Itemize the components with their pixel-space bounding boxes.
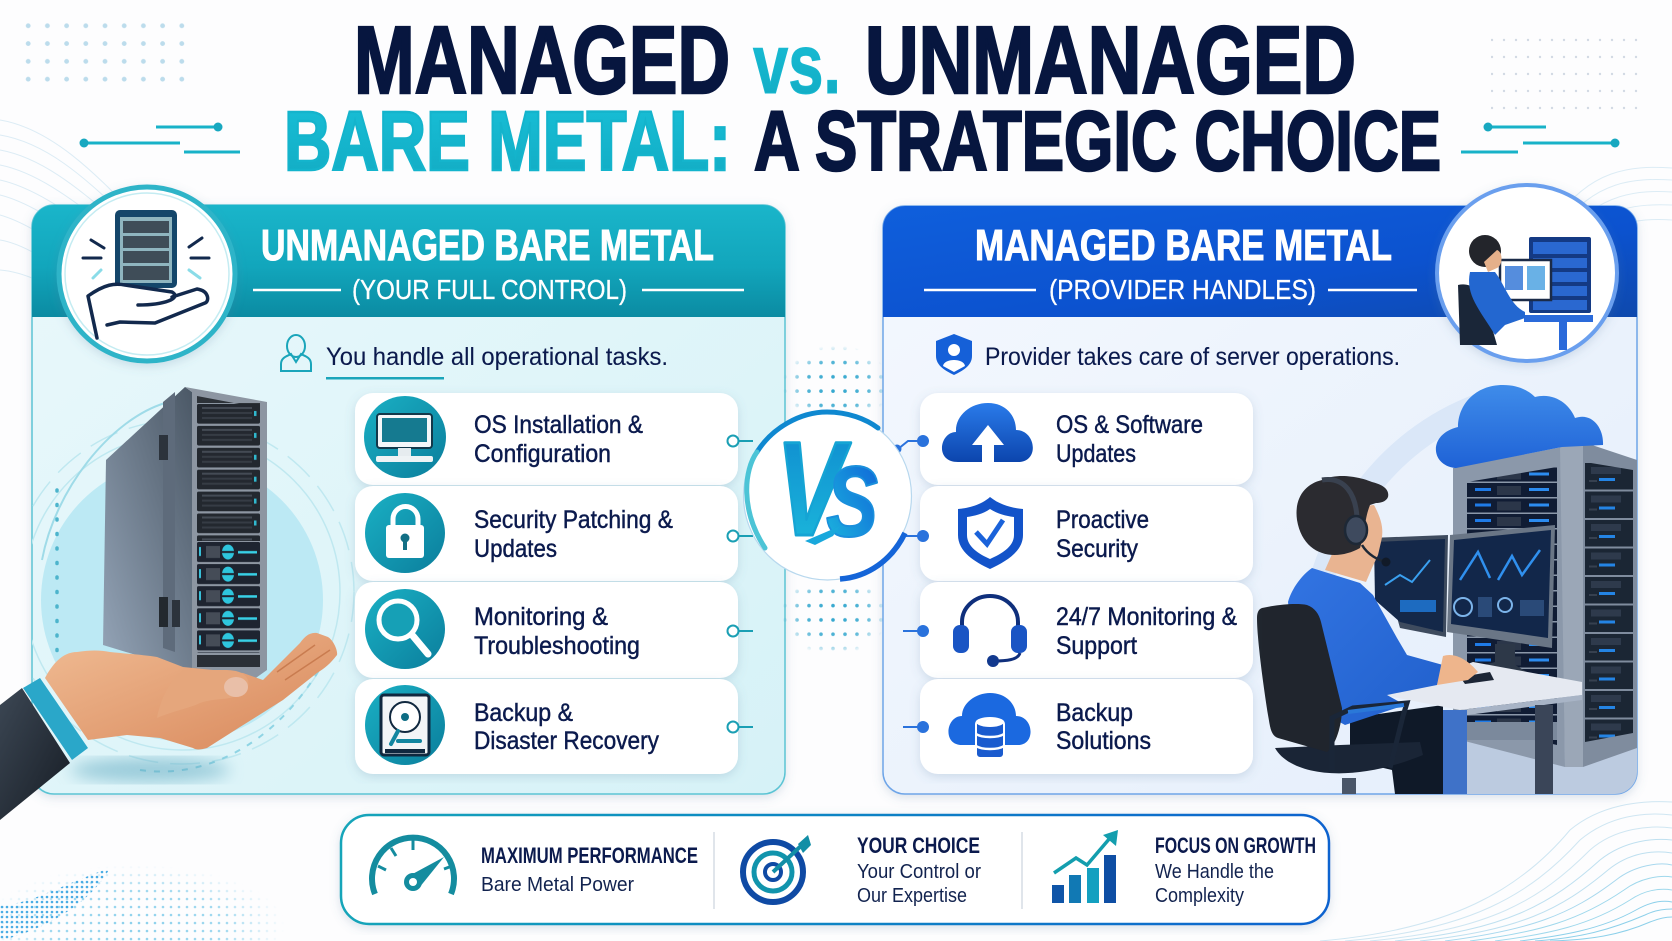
chair pedestal — [1342, 778, 1356, 794]
benefit: choice: Our Expertise — [857, 885, 967, 907]
card: monitoring: Monitoring & — [474, 603, 608, 631]
header title: MANAGED BARE METAL — [975, 221, 1392, 270]
benefit: choice — [857, 833, 981, 907]
decorative orbit — [10, 403, 354, 772]
header title: UNMANAGED BARE METAL — [261, 221, 714, 270]
hand — [45, 633, 337, 750]
card: proactive security: Security — [1056, 535, 1138, 563]
header subtitle: (PROVIDER HANDLES) — [1049, 274, 1316, 305]
icon: growth chart — [1052, 830, 1118, 903]
keyboard — [1460, 672, 1494, 684]
dotted wave: bottom left — [0, 865, 285, 941]
icon: managed badge — [1437, 185, 1617, 361]
cuff — [23, 678, 88, 760]
title: MANAGED — [354, 7, 730, 114]
shirt — [1288, 568, 1443, 725]
card: proactive security: Proactive — [1056, 506, 1149, 534]
sleeve — [0, 688, 70, 820]
card: monitoring — [355, 582, 738, 678]
title accent lines: right — [1461, 122, 1620, 152]
header subtitle: (YOUR FULL CONTROL) — [352, 274, 627, 305]
arc: left cyan — [747, 452, 765, 548]
card: OS updates: Updates — [1056, 440, 1136, 468]
fingers — [277, 645, 330, 680]
benefit: growth: Complexity — [1155, 885, 1244, 907]
panel: unmanaged bare metal — [32, 205, 785, 794]
tagline: Provider takes care of server operations. — [985, 343, 1400, 371]
benefit: growth — [1155, 833, 1316, 907]
card: OS installation: Configuration — [474, 440, 611, 468]
desk — [1383, 662, 1582, 794]
dot grid: top right — [1491, 29, 1639, 114]
halftone bottom — [783, 578, 882, 650]
engineer legs — [1350, 705, 1443, 794]
title — [284, 7, 1441, 188]
badge monitor — [1500, 260, 1551, 300]
panel: managed bare metal — [883, 206, 1637, 794]
monitor right — [1447, 525, 1555, 648]
VS badge — [744, 345, 912, 656]
benefit: choice: Your Control or — [857, 861, 981, 883]
halftone top — [784, 346, 883, 408]
panel header — [883, 206, 1637, 317]
card: 24/7 monitoring: 24/7 Monitoring & — [1056, 603, 1237, 631]
icon: gauge — [372, 838, 454, 894]
card: OS updates — [920, 393, 1253, 485]
engineer hand — [1437, 655, 1478, 685]
ring — [744, 412, 912, 580]
list: managed services — [894, 393, 1253, 774]
VS letters: V — [776, 415, 851, 564]
floor — [1467, 742, 1637, 794]
card: security patching: Updates — [474, 535, 557, 563]
benefit: growth: FOCUS ON GROWTH — [1155, 833, 1316, 858]
panel header — [32, 205, 785, 317]
badge hand — [88, 284, 208, 338]
card: backup — [355, 679, 738, 774]
connectors: left — [728, 436, 753, 732]
title: A STRATEGIC CHOICE — [754, 94, 1441, 188]
benefit: performance — [481, 843, 698, 896]
chair back — [1257, 604, 1342, 752]
cloud — [1436, 385, 1603, 468]
card: monitoring: Troubleshooting — [474, 632, 640, 660]
dotted column — [55, 490, 59, 660]
chair seat — [1275, 742, 1423, 773]
tagline: You handle all operational tasks. — [326, 343, 668, 371]
neck and face — [1325, 505, 1382, 582]
monitor left — [1370, 535, 1448, 637]
list: unmanaged tasks — [355, 393, 753, 774]
card: backup: Disaster Recovery — [474, 727, 659, 755]
card: OS updates: OS & Software — [1056, 411, 1203, 439]
card: backup solutions: Backup — [1056, 699, 1133, 727]
illustration: engineer at server rack — [1257, 385, 1640, 796]
badge rack — [1529, 237, 1591, 313]
card: security patching: Security Patching & — [474, 506, 673, 534]
icon: target — [743, 835, 811, 902]
shadow — [70, 758, 230, 782]
thumb — [157, 670, 248, 718]
card: security patching — [355, 486, 738, 581]
glow circle — [41, 459, 323, 741]
panel body — [883, 206, 1637, 794]
card: backup solutions: Solutions — [1056, 727, 1151, 755]
badge person — [1469, 235, 1525, 335]
card: 24/7 monitoring: Support — [1056, 632, 1137, 660]
arc: bottom right blue — [840, 533, 905, 579]
title accent lines: left — [80, 122, 240, 152]
title: UNMANAGED — [865, 7, 1356, 114]
card: proactive security — [920, 486, 1253, 581]
benefit: choice: YOUR CHOICE — [857, 833, 980, 858]
card: backup solutions — [920, 679, 1253, 774]
badge desk — [1524, 315, 1593, 350]
icon: unmanaged badge — [59, 187, 235, 361]
dot grid: top left — [12, 18, 185, 89]
badge server — [115, 210, 177, 288]
thumbnail — [224, 677, 248, 697]
hair — [1297, 476, 1388, 555]
connectors: right — [894, 436, 928, 732]
bottom benefits bar — [341, 815, 1329, 924]
monitor stand — [1486, 644, 1526, 672]
panel body — [32, 205, 785, 794]
title: vs. — [753, 17, 841, 111]
rack — [1453, 442, 1637, 767]
card: 24/7 monitoring — [920, 582, 1253, 678]
VS letters: S — [826, 446, 878, 558]
title: BARE METAL: — [284, 94, 731, 188]
benefit: performance: Bare Metal Power — [481, 874, 634, 896]
benefit: growth: We Handle the — [1155, 861, 1274, 883]
headset — [1322, 479, 1390, 566]
arc: top blue — [757, 412, 878, 452]
benefit: performance: MAXIMUM PERFORMANCE — [481, 843, 698, 868]
card: backup: Backup & — [474, 699, 573, 727]
tagline — [281, 335, 668, 380]
illustration: hand holding server — [0, 387, 354, 820]
dividers — [714, 832, 1022, 909]
badge chair — [1458, 284, 1497, 345]
card: OS installation: OS Installation & — [474, 411, 643, 439]
chair armrest — [1332, 703, 1407, 770]
glow arc — [1312, 395, 1472, 575]
tagline — [936, 334, 1400, 375]
card: OS installation — [355, 393, 738, 485]
server — [103, 387, 267, 680]
badge rays — [83, 238, 209, 278]
